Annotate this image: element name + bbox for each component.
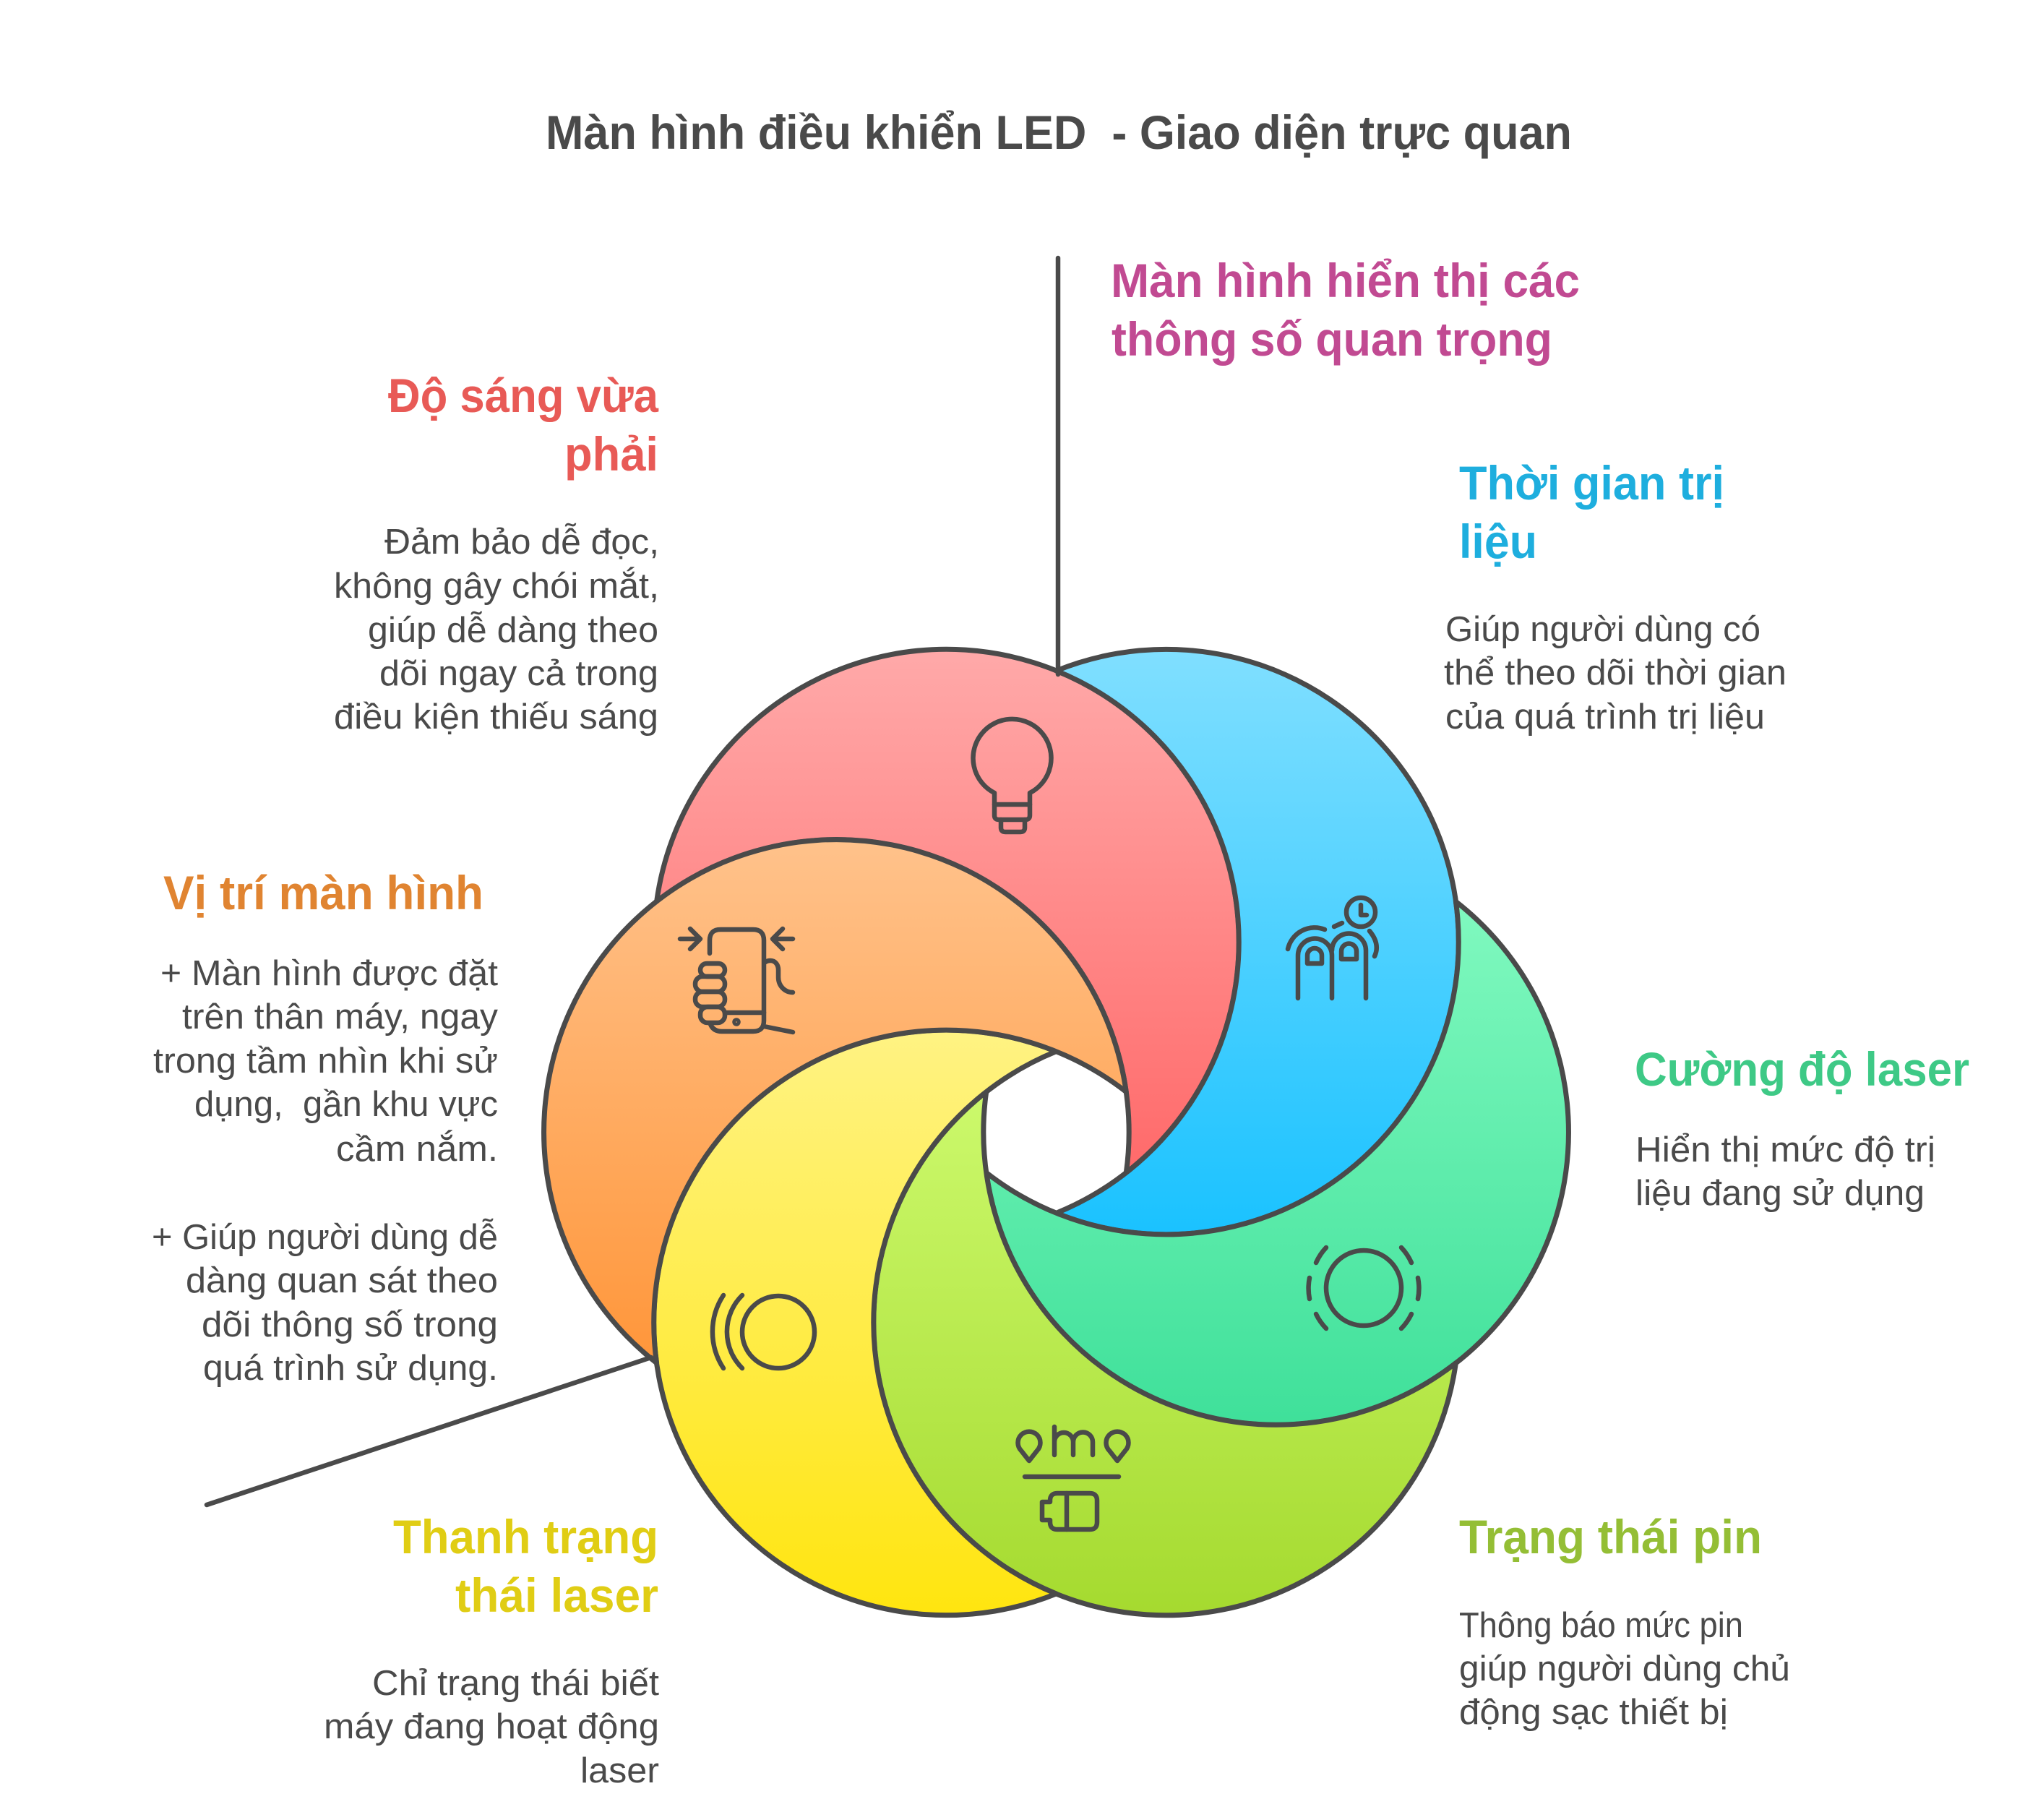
description: trên thân máy, ngay [182,997,498,1036]
panel: battery status [1459,1510,1790,1732]
description: + Màn hình được đặt [160,954,498,993]
connector line: screen position [207,1357,651,1505]
heading: Vị trí màn hình [163,866,483,919]
icon: fingers with clock [1288,898,1377,998]
description [1635,1130,1935,1213]
heading [1459,456,1724,568]
crescent: brightness (red) [657,649,1239,1172]
heading: Thời gian trị [1459,456,1724,510]
description: của quá trình trị liệu [1445,697,1765,737]
crescent: therapy time (blue) [1057,649,1458,1235]
description: dõi thông số trong [202,1305,498,1344]
description: laser [580,1751,659,1790]
icon: vibrating circle [1309,1248,1419,1328]
panel: important parameters heading: Màn hình hiển thị các [1111,254,1580,307]
icon: hand holding phone [680,929,793,1032]
icon: light bulb [973,719,1051,832]
crescent: laser status bar (yellow) [654,1030,1057,1615]
description: dàng quan sát theo [186,1261,498,1300]
flower diagram [544,649,1568,1615]
description: Chỉ trạng thái biết [372,1664,659,1703]
heading: phải [564,427,658,481]
description: quá trình sử dụng. [203,1349,498,1388]
description: Đảm bảo dễ đọc, [384,523,659,562]
description: Hiển thị mức độ trị [1635,1130,1935,1169]
panel: laser intensity [1635,1042,1969,1213]
panel: screen position [152,866,498,1388]
heading [393,1510,658,1622]
description: động sạc thiết bị [1459,1693,1728,1732]
crescent: laser intensity (green) [986,901,1568,1425]
description: + Giúp người dùng dễ [152,1218,498,1257]
title: Màn hình điều khiển LED - Giao diện trực quan [546,106,1572,159]
description [152,954,498,1388]
panel: brightness [334,369,659,737]
description: cầm nắm. [336,1130,498,1169]
heading: Trạng thái pin [1459,1510,1762,1563]
panel: therapy time [1444,456,1787,737]
icon: laser signal [713,1295,814,1368]
heading: Thanh trạng [393,1510,658,1563]
connector line: display heading [1056,258,1060,674]
icon: battery with pins [1018,1427,1128,1529]
panel: laser status bar [324,1510,659,1790]
description: liệu đang sử dụng [1635,1174,1925,1213]
panel: important parameters heading [1111,254,1580,366]
heading: Cường độ laser [1635,1042,1969,1096]
description: Giúp người dùng có [1445,610,1760,649]
description: dõi ngay cả trong [379,654,658,693]
description: trong tầm nhìn khi sử [153,1042,498,1081]
crescent: screen position (orange) [544,840,1126,1363]
description: Thông báo mức pin [1459,1606,1743,1645]
description [1459,1606,1790,1732]
crescent: battery status (lime) [874,1092,1456,1615]
heading: thái laser [455,1568,658,1622]
description: máy đang hoạt động [324,1707,659,1746]
heading: Độ sáng vừa [388,369,659,422]
description: không gây chói mắt, [334,567,659,606]
description [1444,610,1787,737]
heading: liệu [1459,515,1537,568]
heading [388,369,659,481]
description: dụng, gần khu vực [194,1085,498,1124]
description: giúp dễ dàng theo [368,611,658,650]
description [334,523,659,737]
description: thể theo dõi thời gian [1444,653,1787,692]
description: điều kiện thiếu sáng [334,697,658,737]
panel: important parameters heading: thông số quan trọng [1112,312,1552,366]
description [324,1664,659,1790]
description: giúp người dùng chủ [1459,1649,1790,1688]
